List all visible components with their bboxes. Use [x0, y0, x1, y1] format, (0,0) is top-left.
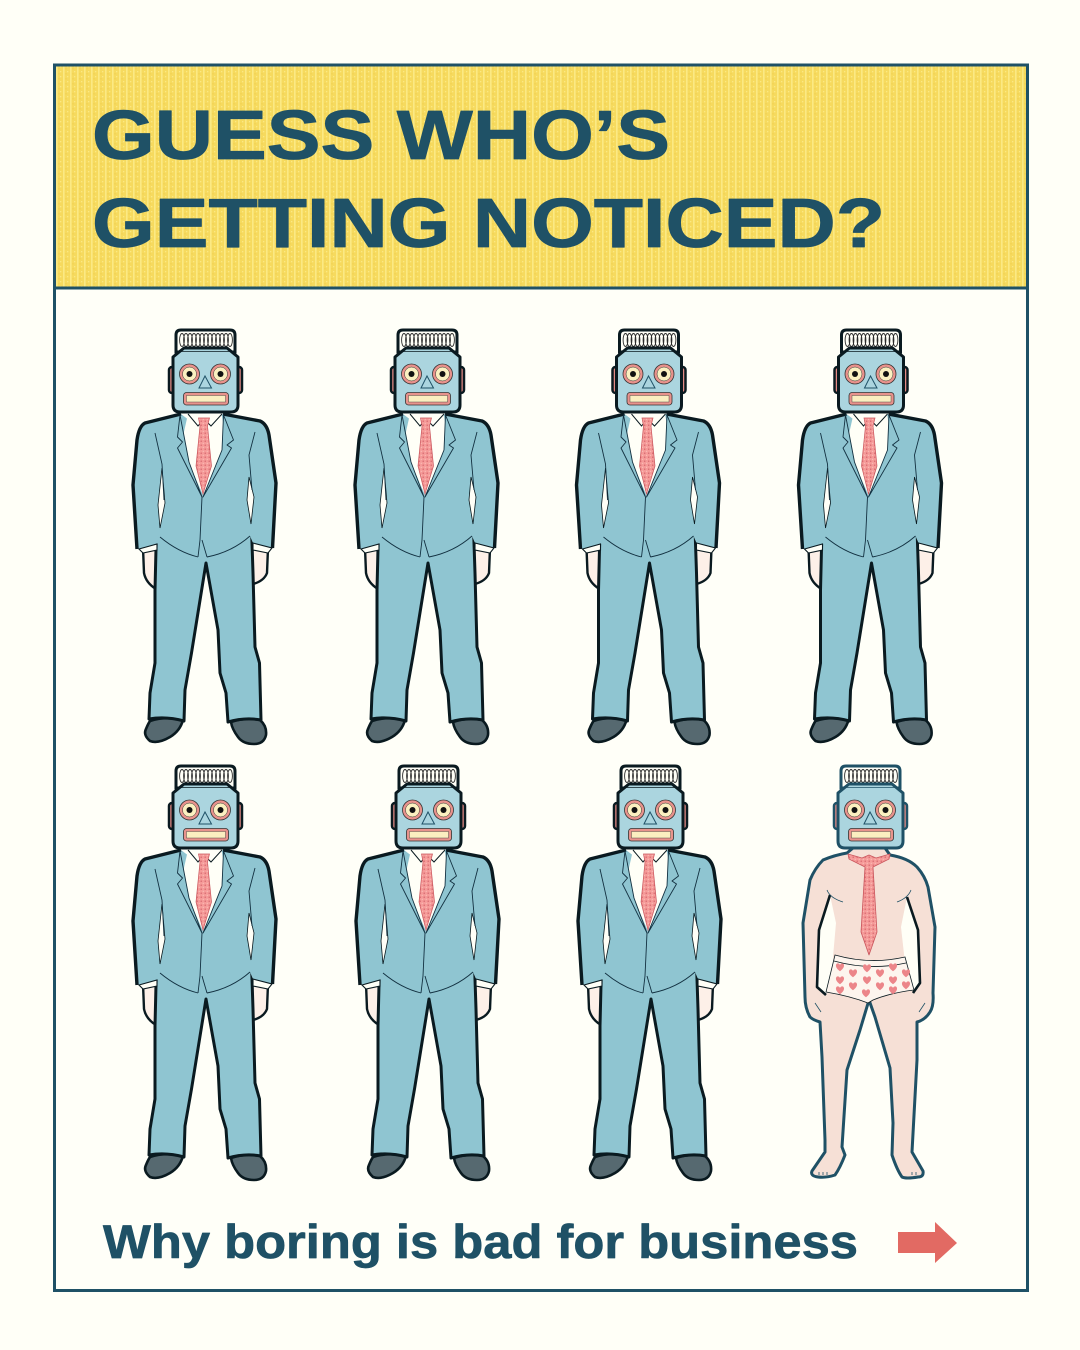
figure: suited robot 3: [576, 330, 720, 744]
chest and hip creases: [815, 890, 925, 1175]
figure: suited robot 7: [578, 766, 721, 1180]
figure: suited robot 4: [798, 330, 942, 744]
arm gaps: [817, 895, 920, 995]
icon: arrow: [898, 1222, 957, 1263]
figure: suited robot 5: [133, 766, 276, 1180]
panel: yellow title banner: [54, 66, 1028, 288]
figure: robot in underwear: [803, 766, 935, 1178]
underwear: [826, 955, 914, 1003]
footer caption: Why boring is bad for business: [103, 1215, 858, 1268]
figure: suited robot 2: [355, 330, 498, 744]
robot head: [834, 766, 907, 848]
title: GETTING NOTICED?: [92, 184, 885, 262]
necktie: [848, 854, 890, 955]
figure: suited robot 6: [356, 766, 499, 1180]
bare body: [803, 848, 935, 1178]
title: GUESS WHO’S: [92, 96, 670, 174]
title: [92, 96, 885, 262]
hearts: [836, 963, 910, 997]
figure: suited robot 1: [133, 330, 276, 744]
